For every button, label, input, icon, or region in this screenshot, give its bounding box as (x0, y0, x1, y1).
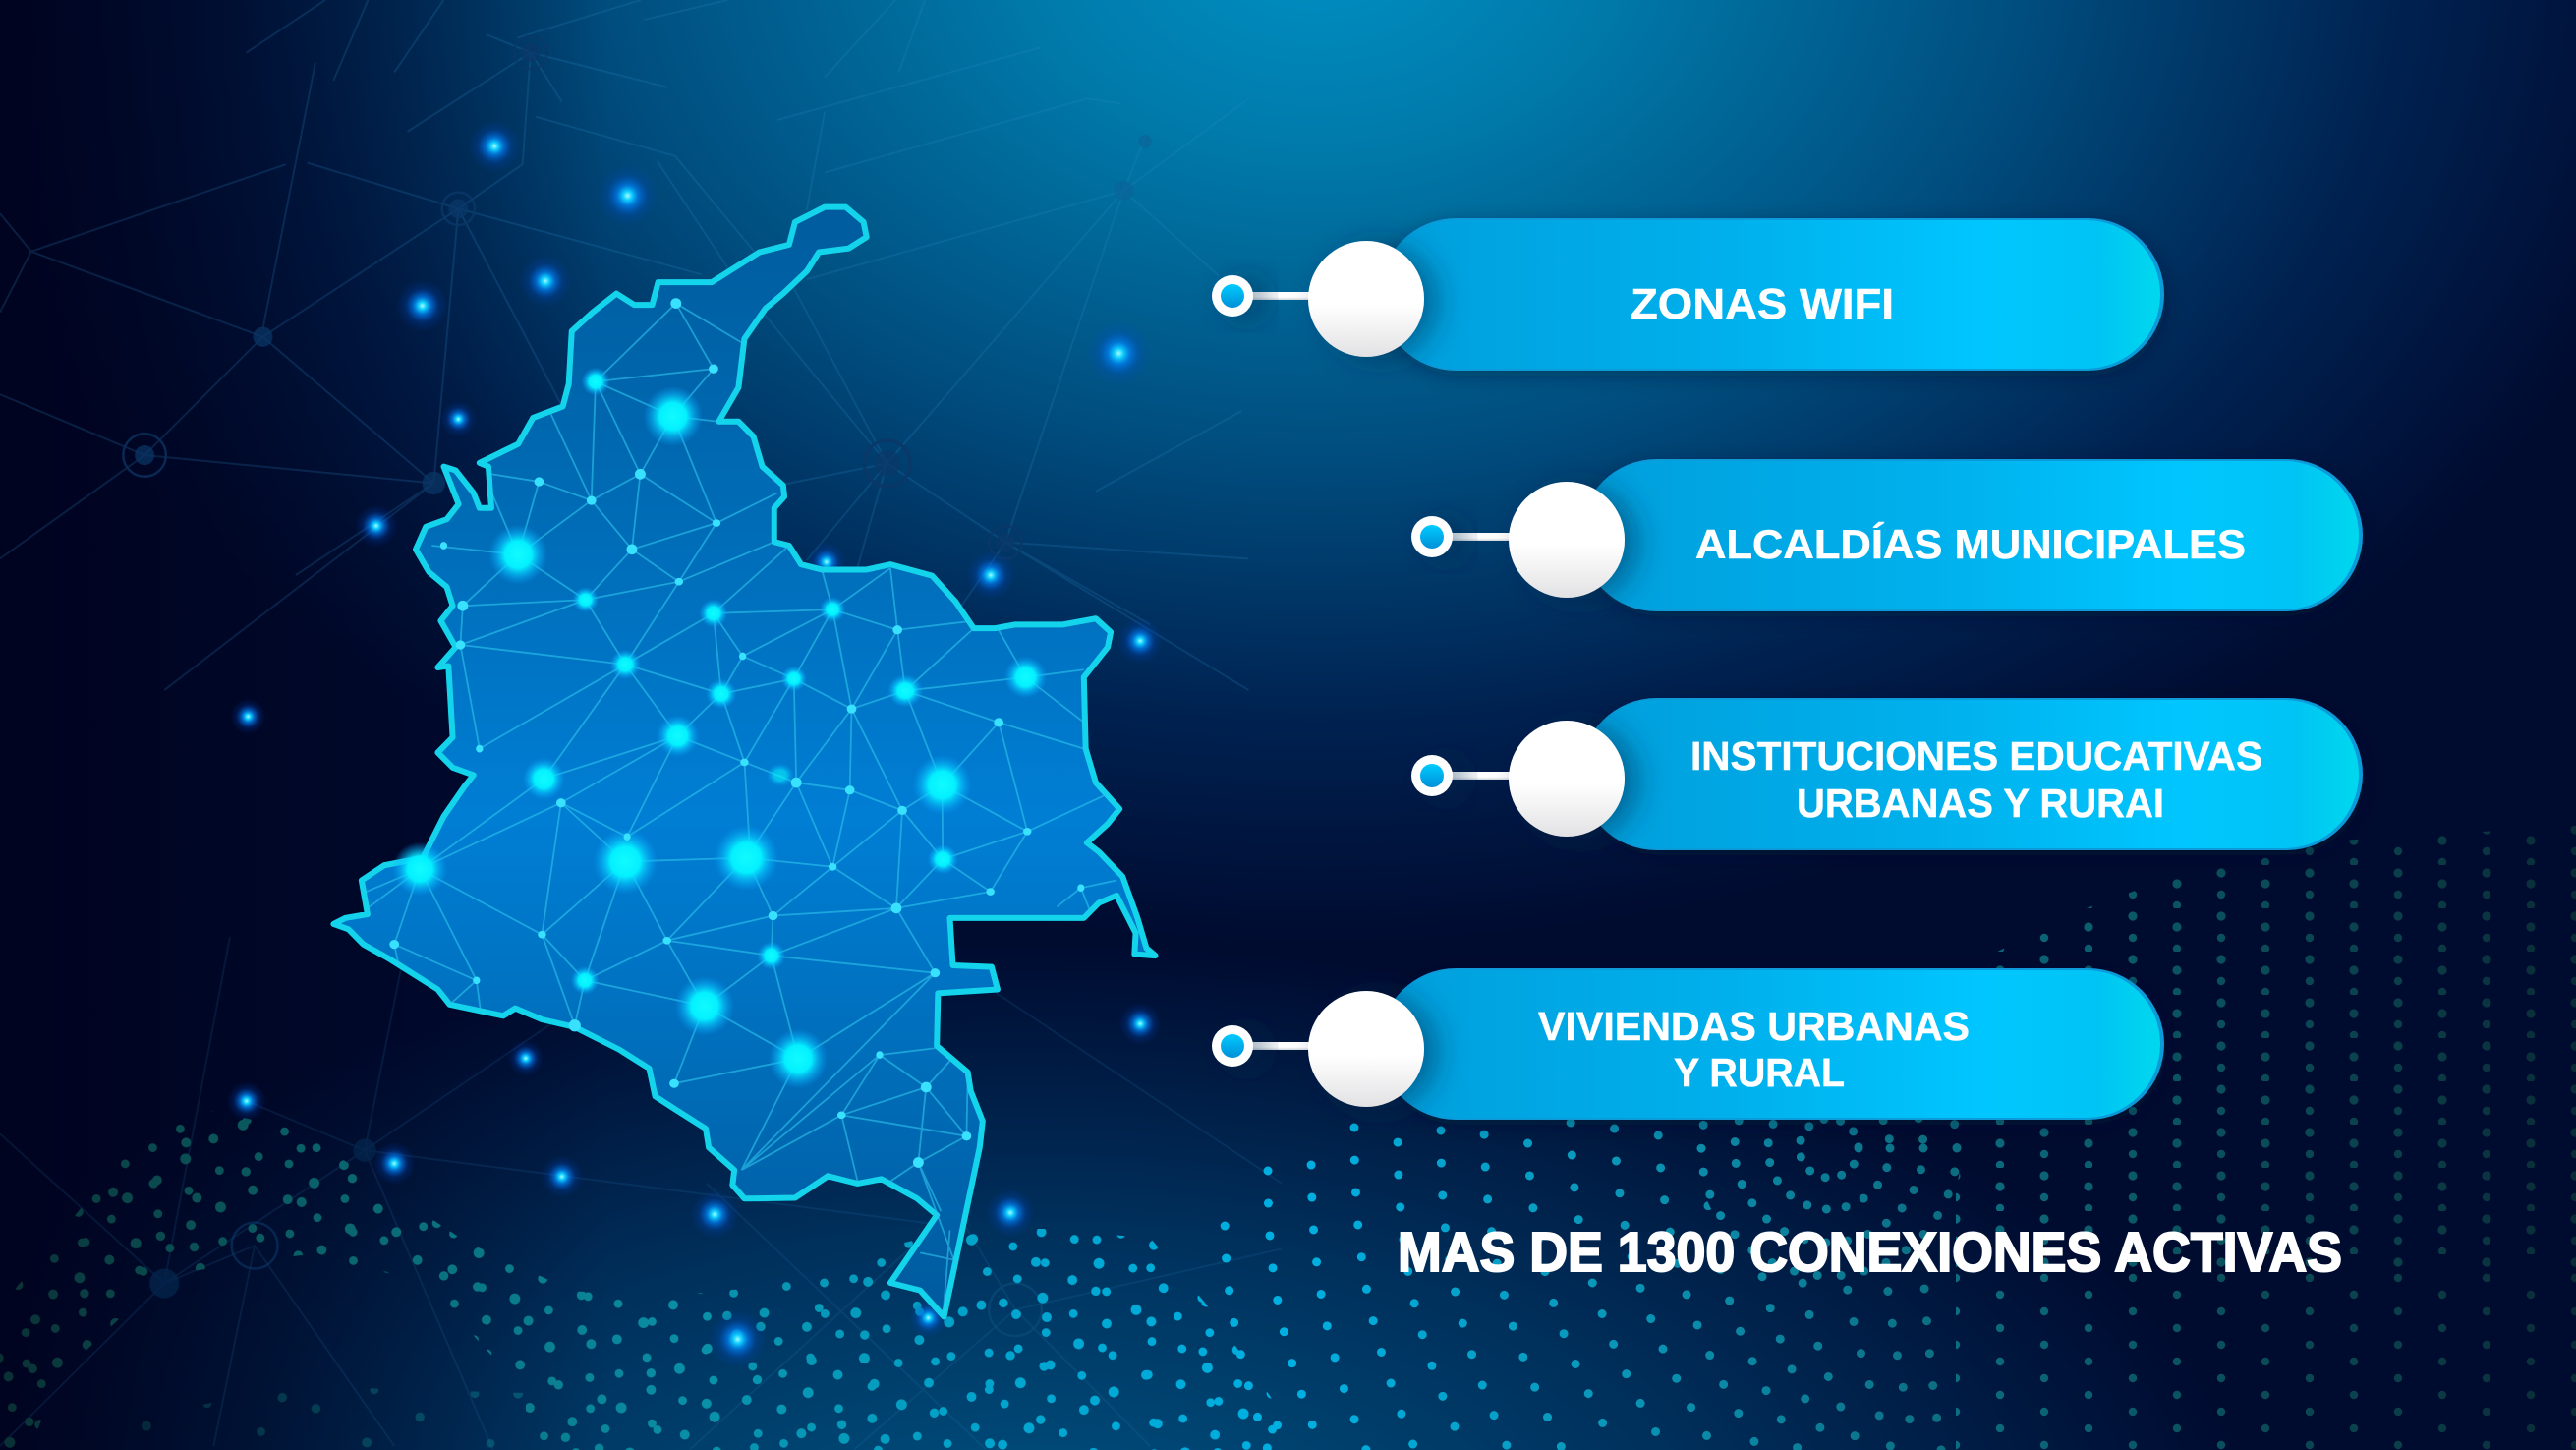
small mesh nodes (389, 298, 1084, 1168)
map of Colombia (333, 207, 1156, 1316)
label: VIVIENDAS URBANAS (1538, 1004, 1970, 1049)
label (1690, 733, 2262, 826)
pill body (1380, 968, 2164, 1120)
map mesh lines (355, 304, 1116, 1305)
pill: viviendas urbanas y rural (1212, 968, 2164, 1120)
connector stem (1250, 1042, 1311, 1050)
pill body (1380, 218, 2164, 371)
label: INSTITUCIONES EDUCATIVAS (1690, 733, 2262, 779)
pill: instituciones educativas (1411, 698, 2363, 850)
label: Y RURAL (1674, 1050, 1845, 1095)
country shape (333, 207, 1156, 1316)
pill body (1580, 459, 2363, 611)
ring node (1212, 275, 1253, 317)
pill body (1580, 698, 2363, 850)
label: ALCALDÍAS MUNICIPALES (1695, 521, 2246, 567)
white disc (1308, 241, 1424, 357)
white disc (1509, 721, 1625, 837)
label (1538, 1004, 1970, 1095)
large glowing nodes (392, 368, 1047, 1089)
label: ZONAS WIFI (1631, 280, 1894, 328)
particle wave dots (0, 826, 2576, 1450)
connector stem (1250, 292, 1311, 300)
pill: zonas wifi (1212, 218, 2164, 371)
glowing stars around the map (227, 120, 1163, 1368)
ring node (1411, 755, 1453, 796)
ring node (1411, 516, 1453, 557)
pill: alcaldias municipales (1411, 459, 2363, 611)
ring node (1212, 1025, 1253, 1067)
connector stem (1450, 533, 1511, 541)
headline: connections count: MAS DE 1300 CONEXIONES ACTIVAS (1398, 1221, 2342, 1284)
label: URBANAS Y RURAI (1797, 781, 2164, 826)
connector stem (1450, 772, 1511, 780)
background network lines (0, 0, 1282, 1449)
white disc (1509, 482, 1625, 598)
white disc (1308, 991, 1424, 1107)
